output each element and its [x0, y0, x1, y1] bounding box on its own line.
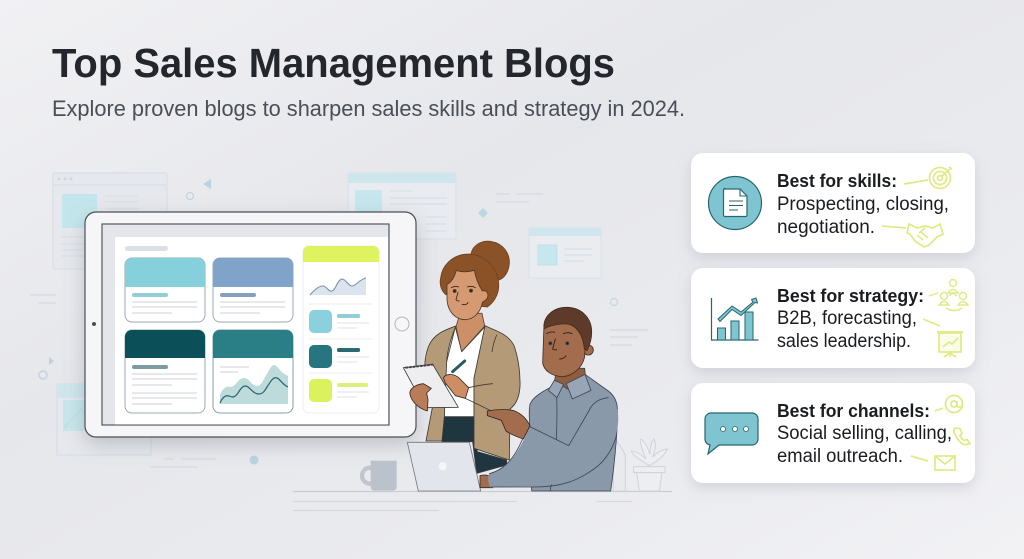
decorative dashes: [30, 194, 648, 467]
window: top left: [53, 173, 167, 269]
ear: [583, 345, 593, 355]
window: right: [529, 228, 601, 278]
sleeve: [488, 409, 618, 488]
shirt body: [529, 374, 617, 491]
dashboard card: light teal: [125, 258, 205, 322]
card text: Best for strategy:: [777, 286, 924, 306]
card text: [777, 401, 952, 467]
hair bun: [471, 241, 509, 280]
icon: target: [904, 167, 952, 188]
neck: [555, 368, 585, 389]
pointing hand: [487, 409, 530, 439]
hair: [544, 307, 592, 351]
notepad: [403, 364, 458, 408]
dashboard card: dark teal: [125, 330, 205, 413]
card text: [777, 286, 924, 352]
card text: Best for skills:: [777, 171, 897, 191]
card: best for skills: [691, 153, 975, 253]
man: [480, 307, 618, 491]
desk line: [293, 492, 672, 510]
title: Top Sales Management Blogs: [52, 40, 615, 86]
coffee mug: [362, 461, 397, 491]
window: bottom left: [57, 384, 151, 455]
icon: at sign: [935, 396, 962, 412]
illustration: people and desk: [362, 241, 667, 491]
dashboard card: area chart: [213, 330, 293, 413]
cardigan left: [425, 326, 456, 441]
icon: speech bubble: [705, 413, 758, 454]
dashboard card: slate blue: [213, 258, 293, 322]
icon: team network: [929, 280, 968, 310]
icon: envelope: [911, 456, 955, 470]
hair main: [440, 254, 499, 307]
icon: phone: [954, 428, 970, 445]
card: best for channels: [691, 383, 975, 483]
background decorative browser windows: [30, 173, 648, 467]
icon: growth bar chart: [712, 298, 758, 340]
card text: B2B, forecasting,: [777, 308, 917, 329]
skirt: [442, 417, 507, 473]
icon: handshake: [882, 224, 943, 247]
card text: [777, 171, 949, 238]
card text: Best for channels:: [777, 401, 930, 421]
pen: [453, 361, 465, 372]
card text: email outreach.: [777, 446, 903, 467]
tablet camera dot: [92, 322, 96, 326]
tablet: [85, 212, 416, 437]
sidebar panel: [303, 246, 379, 413]
left hand: [410, 384, 431, 411]
face: [543, 313, 585, 377]
white top: [444, 327, 485, 417]
right hand: [443, 374, 469, 398]
neck: [456, 313, 485, 352]
decorative dots and shapes: [39, 179, 618, 464]
card: best for strategy: [691, 268, 975, 368]
subtitle: Explore proven blogs to sharpen sales skills and strategy in 2024.: [52, 96, 685, 121]
card text: sales leadership.: [777, 331, 911, 352]
tablet home button: [395, 317, 409, 331]
icon: presentation board: [923, 319, 963, 357]
card text: negotiation.: [777, 217, 875, 238]
collar: [548, 374, 591, 399]
cardigan right: [474, 326, 520, 460]
tablet body: [85, 212, 416, 437]
card text: Prospecting, closing,: [777, 194, 949, 215]
card text: Social selling, calling,: [777, 423, 952, 444]
woman: [403, 241, 520, 473]
potted plant: [613, 438, 667, 491]
laptop: [407, 442, 481, 491]
face: [447, 270, 488, 320]
window: top centre: [348, 173, 456, 239]
icon: document in circle: [708, 176, 762, 230]
tablet screen: [102, 224, 389, 425]
hand on laptop: [480, 475, 493, 488]
